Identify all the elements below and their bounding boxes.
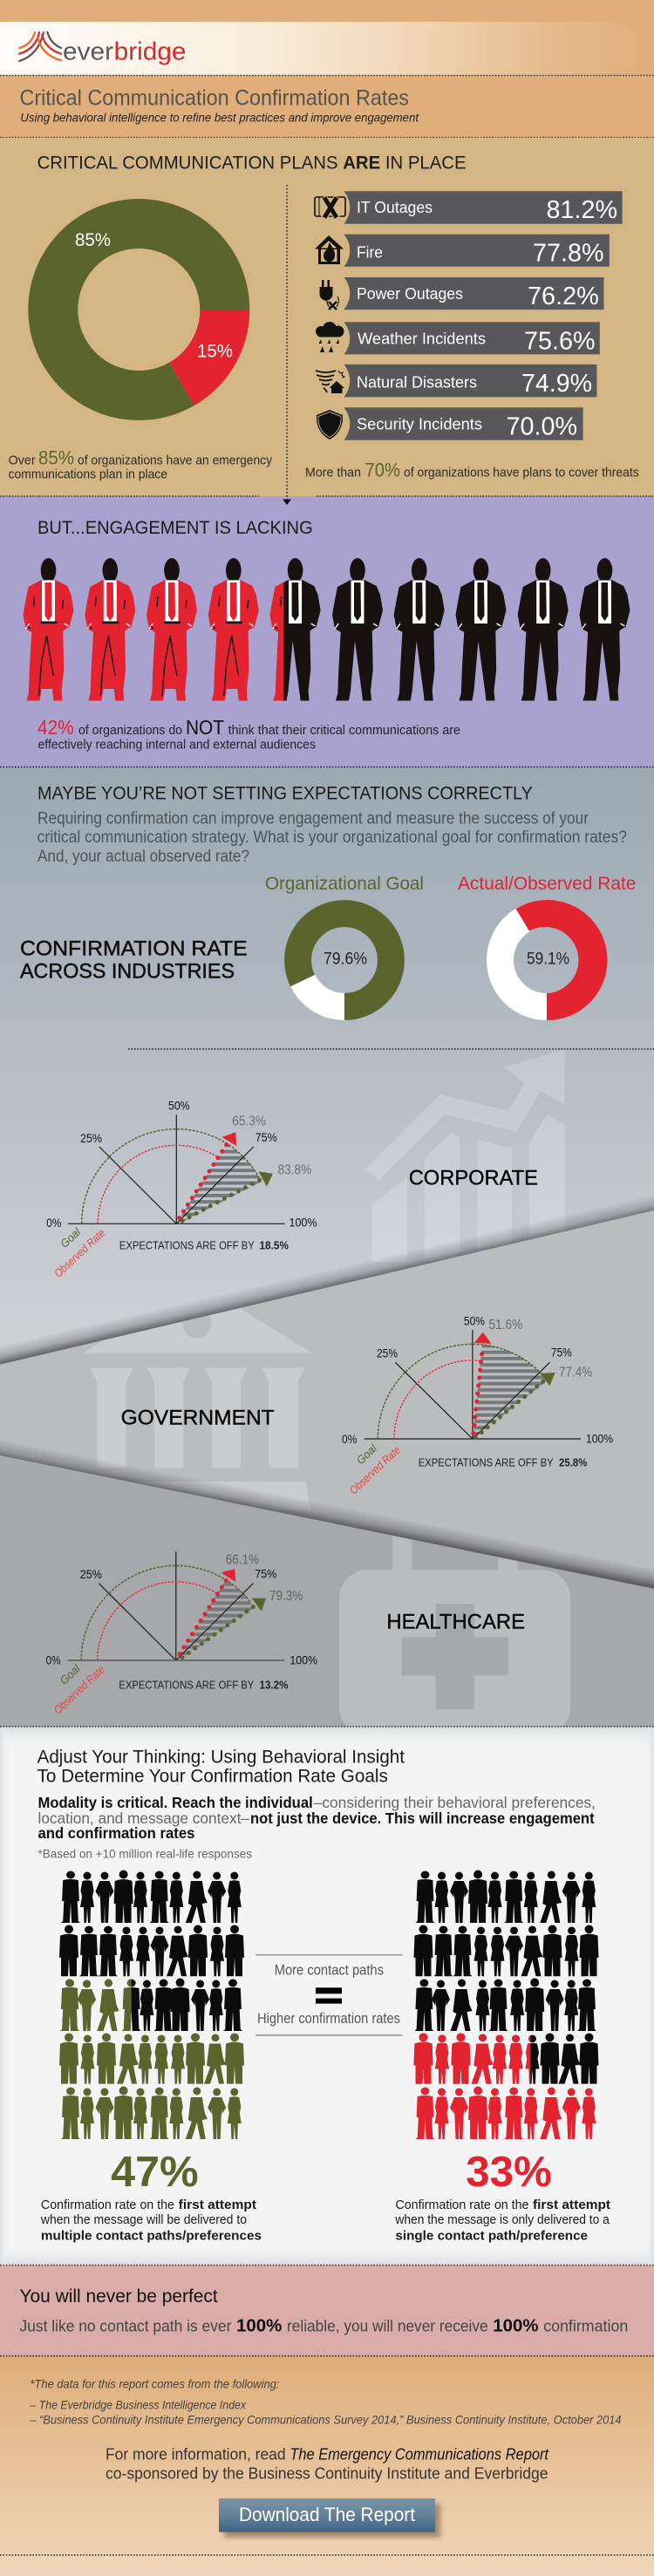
donut caption: of organizations have an emergency xyxy=(78,453,272,468)
engagement caption: think that their critical communications are xyxy=(228,723,460,738)
statement: 100% xyxy=(236,2316,283,2335)
bar: IT outages xyxy=(315,191,623,224)
chart: healthcare gauge: EXPECTATIONS ARE OFF BY xyxy=(119,1679,255,1692)
icon: shield xyxy=(317,410,343,440)
caption: single contact path: Confirmation rate on the xyxy=(395,2198,528,2212)
chart: government gauge: Observed Rate xyxy=(347,1443,403,1496)
panel: expectations background xyxy=(0,767,654,1378)
donut caption: 85% xyxy=(38,447,74,469)
chart: government gauge: 25% xyxy=(377,1346,398,1360)
icon: everbridge logo arches xyxy=(19,32,61,61)
chart: corporate gauge: 50% xyxy=(168,1098,190,1112)
chart: corporate gauge: EXPECTATIONS ARE OFF BY xyxy=(119,1239,255,1252)
threats caption xyxy=(305,459,639,481)
bar: natural disasters: Natural Disasters xyxy=(357,373,477,391)
modality paragraph: location, and message context– xyxy=(38,1809,249,1827)
bar: natural disasters: 74.9% xyxy=(521,370,592,398)
chart: corporate gauge xyxy=(46,1098,317,1280)
sources list xyxy=(29,2376,622,2426)
heading: To Determine Your Confirmation Rate Goals xyxy=(37,1766,388,1786)
caption: multiple contact paths: Confirmation rate on the xyxy=(41,2198,174,2212)
chart: actual observed rate donut: Actual/Observed Rate xyxy=(458,874,636,894)
chart: corporate gauge: 25% xyxy=(80,1131,102,1145)
logo wordmark: bridge xyxy=(114,38,187,66)
icon: IT outage xyxy=(315,197,345,218)
panel: engagement is lacking xyxy=(0,496,654,767)
chart: healthcare gauge: Goal xyxy=(58,1661,84,1687)
arrow: dotted connector between panels xyxy=(283,185,291,505)
heading: confirmation rate across industries: ACROSS INDUSTRIES xyxy=(20,960,235,984)
chart: government gauge xyxy=(342,1313,613,1496)
icon: government building xyxy=(84,1308,311,1510)
chart: healthcare gauge: 100% xyxy=(290,1653,317,1666)
threats caption: More than xyxy=(305,466,361,480)
caption: single contact path xyxy=(394,2198,610,2243)
donut caption xyxy=(9,447,272,481)
people row: 10 figures, 4.2 red xyxy=(23,558,630,701)
header logo strip xyxy=(0,22,654,75)
chart: government gauge: 75% xyxy=(551,1346,572,1360)
diagonal fold shadow: corporate xyxy=(0,1190,654,1366)
bar: IT outages: 81.2% xyxy=(546,196,617,224)
chart: government gauge: EXPECTATIONS ARE OFF BY xyxy=(419,1456,554,1469)
more information text xyxy=(106,2446,549,2483)
diagonal fold shadow: government xyxy=(0,1435,654,1590)
threats caption: of organizations have plans to cover threats xyxy=(404,466,639,480)
logo wordmark: ever xyxy=(63,38,113,66)
bar: weather incidents xyxy=(316,322,600,356)
chart: government gauge: 50% xyxy=(464,1313,485,1327)
chart: organizational goal donut: 79.6% xyxy=(324,951,367,968)
panel: you will never be perfect xyxy=(0,2266,654,2356)
icon: storm cloud xyxy=(316,322,344,352)
chart: organizational goal donut xyxy=(265,874,424,1020)
footnote: *Based on +10 million real-life responses xyxy=(38,1846,252,1860)
caption: single contact path: single contact path/preference xyxy=(395,2228,588,2243)
logo wordmark xyxy=(63,38,187,66)
modality paragraph: not just the device. This will increase engagement xyxy=(250,1809,595,1827)
chart: healthcare gauge: 79.3% xyxy=(269,1589,303,1604)
modality paragraph: Modality is critical. Reach the individual xyxy=(38,1794,313,1811)
donut chart: 85 percent xyxy=(28,199,249,420)
engagement caption: 42% xyxy=(37,716,74,739)
panel: communication plans xyxy=(0,138,654,496)
heading: You will never be perfect xyxy=(19,2286,218,2307)
heading: Adjust Your Thinking: Using Behavioral Insight xyxy=(37,1748,405,1767)
bar: weather incidents: Weather Incidents xyxy=(358,331,486,348)
caption: multiple contact paths: when the message will be delivered to xyxy=(40,2212,247,2227)
stat: 47 percent: 47% xyxy=(111,2149,199,2196)
statement: reliable, you will never receive xyxy=(287,2317,488,2334)
modality paragraph: and confirmation rates xyxy=(38,1824,195,1842)
panel: adjust your thinking xyxy=(0,1727,654,2266)
bar: security incidents xyxy=(317,407,583,440)
chart: actual observed rate donut xyxy=(458,874,636,1020)
panel: healthcare xyxy=(0,1455,654,1735)
statement xyxy=(19,2316,628,2335)
expectations paragraph xyxy=(37,810,627,866)
heading: government: GOVERNMENT xyxy=(121,1406,275,1429)
heading: healthcare: HEALTHCARE xyxy=(386,1611,525,1634)
chart: corporate gauge: 100% xyxy=(290,1216,317,1230)
chart: corporate gauge: Observed Rate xyxy=(51,1226,107,1280)
chart: healthcare gauge: Observed Rate xyxy=(51,1663,107,1716)
caption: multiple contact paths: first attempt xyxy=(179,2198,256,2212)
chart: corporate gauge: 65.3% xyxy=(232,1114,266,1129)
chart: corporate gauge: 18.5% xyxy=(260,1239,289,1252)
button: download the report xyxy=(219,2498,440,2538)
icon: first aid kit xyxy=(339,1524,570,1735)
chart: healthcare gauge: 66.1% xyxy=(226,1552,259,1567)
title: Critical Communication Confirmation Rates xyxy=(19,85,409,110)
bar: power outages: 76.2% xyxy=(528,283,599,310)
heading: BUT...ENGAGEMENT IS LACKING xyxy=(37,517,313,538)
engagement caption: NOT xyxy=(186,716,224,739)
sources list: *The data for this report comes from the following: xyxy=(30,2376,280,2390)
modality paragraph xyxy=(38,1794,596,1842)
threats caption: 70% xyxy=(364,459,400,481)
heading: CRITICAL COMMUNICATION PLANS ARE IN PLACE xyxy=(37,153,467,173)
top colour band xyxy=(0,0,654,22)
chart: healthcare gauge: 0% xyxy=(46,1653,61,1666)
caption: single contact path: first attempt xyxy=(533,2198,610,2212)
subtitle: Using behavioral intelligence to refine best practices and improve engagement xyxy=(20,112,419,125)
chart: corporate gauge: 75% xyxy=(255,1130,277,1144)
engagement caption: of organizations do xyxy=(78,723,182,738)
chart: government gauge: Goal xyxy=(354,1441,380,1467)
chart: government gauge: 0% xyxy=(342,1432,357,1446)
engagement caption xyxy=(37,716,460,752)
statement: Just like no contact path is ever xyxy=(19,2317,231,2334)
stat: 33 percent: 33% xyxy=(466,2149,552,2196)
donut chart: 85 percent: 85% xyxy=(75,230,111,250)
icon: corporate growth chart xyxy=(366,1049,565,1262)
chart: corporate gauge: Goal xyxy=(58,1224,84,1251)
more information text: The Emergency Communications Report xyxy=(290,2446,549,2464)
chart: healthcare gauge xyxy=(46,1551,317,1716)
chart: government gauge: 77.4% xyxy=(559,1365,592,1380)
crowd: multiple contact paths, 47 percent xyxy=(59,1870,244,2139)
chart: healthcare gauge: 25% xyxy=(80,1567,102,1581)
equation: more contact paths equals higher confirmation rates xyxy=(255,1955,403,2035)
modality paragraph: –considering their behavioral preferences, xyxy=(314,1794,596,1811)
chart: government gauge: 51.6% xyxy=(489,1318,522,1332)
bar: fire: 77.8% xyxy=(533,240,603,268)
bar: weather incidents: 75.6% xyxy=(524,328,595,356)
icon: house on fire xyxy=(315,235,344,264)
statement: confirmation xyxy=(543,2317,628,2334)
heading: confirmation rate across industries: CONFIRMATION RATE xyxy=(20,937,248,961)
chart: government gauge: 100% xyxy=(586,1432,613,1446)
engagement caption: effectively reaching internal and external audiences xyxy=(38,737,316,752)
sources list: – The Everbridge Business Intelligence Index xyxy=(30,2397,247,2411)
bar: security incidents: 70.0% xyxy=(507,412,577,440)
caption: single contact path: when the message is only delivered to a xyxy=(394,2212,610,2227)
expectations paragraph: And, your actual observed rate? xyxy=(37,848,249,866)
bar: power outages: Power Outages xyxy=(357,285,463,303)
chart: healthcare gauge: 75% xyxy=(255,1566,276,1580)
statement: 100% xyxy=(493,2316,539,2335)
chart: government gauge: 25.8% xyxy=(559,1456,588,1469)
panel: sources footer xyxy=(0,2356,654,2576)
crowd: single contact path, 33 percent xyxy=(413,1870,598,2139)
expectations paragraph: Requiring confirmation can improve engagement and measure the success of your xyxy=(37,810,589,828)
title band xyxy=(0,75,654,138)
bar: natural disasters xyxy=(316,365,596,398)
bar: security incidents: Security Incidents xyxy=(357,415,482,433)
caption: multiple contact paths xyxy=(40,2198,262,2243)
donut caption: communications plan in place xyxy=(9,467,167,481)
donut caption: Over xyxy=(9,453,36,468)
chart: corporate gauge: 83.8% xyxy=(277,1163,311,1178)
heading: expectations: MAYBE YOU’RE NOT SETTING EXPECTATIONS CORRECTLY xyxy=(37,783,533,804)
bar: IT outages: IT Outages xyxy=(357,199,433,216)
chart: corporate gauge: 0% xyxy=(46,1216,61,1230)
more information text: For more information, read xyxy=(106,2446,286,2464)
chart: actual observed rate donut: 59.1% xyxy=(527,951,569,968)
heading: confirmation rate across industries xyxy=(20,937,248,984)
more information text: co-sponsored by the Business Continuity Institute and Everbridge xyxy=(106,2465,548,2483)
bar: fire xyxy=(315,235,610,268)
bar: power outages xyxy=(319,277,603,310)
bar: fire: Fire xyxy=(357,243,383,261)
chart: healthcare gauge: 13.2% xyxy=(260,1679,289,1692)
icon: power plug xyxy=(319,280,338,310)
panel: government xyxy=(0,1210,654,1589)
heading: corporate: CORPORATE xyxy=(409,1166,538,1189)
chart: organizational goal donut: Organizational Goal xyxy=(265,874,424,894)
heading xyxy=(37,1748,405,1786)
button: download the report: Download The Report xyxy=(239,2504,415,2525)
caption: multiple contact paths: multiple contact paths/preferences xyxy=(41,2228,262,2243)
equation: more contact paths equals higher confirmation rates: Higher confirmation rates xyxy=(257,2011,400,2027)
icon: tornado and house xyxy=(316,371,344,393)
equation: more contact paths equals higher confirmation rates: More contact paths xyxy=(275,1963,384,1979)
donut chart: 85 percent: 15% xyxy=(197,342,233,361)
